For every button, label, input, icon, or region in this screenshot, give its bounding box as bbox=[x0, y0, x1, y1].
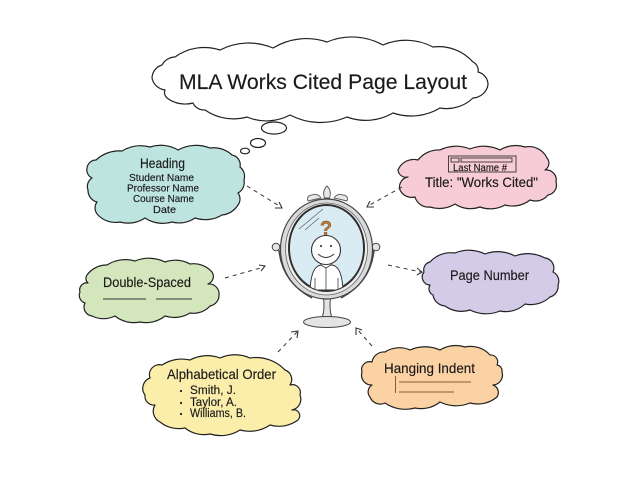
last name label: Last Name # bbox=[453, 163, 507, 174]
indent lines bbox=[396, 376, 471, 393]
page number text: Page Number bbox=[450, 267, 529, 283]
panel: double-spaced bbox=[79, 258, 219, 323]
heading details: Professor Name bbox=[127, 182, 199, 194]
double-spaced text: Double-Spaced bbox=[103, 274, 191, 290]
title: MLA Works Cited Page Layout bbox=[179, 70, 467, 94]
mirror frame bbox=[280, 199, 372, 299]
panel: title works cited bbox=[398, 146, 556, 209]
heading details: Course Name bbox=[133, 193, 194, 205]
arrow: title to mirror bbox=[367, 187, 402, 207]
heading details: Date bbox=[153, 204, 176, 216]
mirror stand bbox=[279, 250, 374, 328]
mirror knobs bbox=[272, 243, 380, 251]
spacing lines bbox=[103, 298, 192, 300]
heading details: Student Name bbox=[129, 172, 194, 184]
heading details bbox=[127, 172, 199, 216]
mirror crest bbox=[308, 186, 348, 201]
mirror glass bbox=[289, 205, 364, 291]
arrow: hanging indent to mirror bbox=[356, 328, 372, 346]
alphabetical order text: Alphabetical Order bbox=[167, 366, 276, 382]
title cloud bbox=[152, 37, 488, 123]
glass reflection bbox=[299, 209, 323, 230]
arrow: heading to mirror bbox=[247, 186, 282, 208]
icon: mirror bbox=[272, 186, 380, 328]
hanging indent text: Hanging Indent bbox=[384, 360, 475, 376]
figure bbox=[310, 236, 343, 291]
arrow: mirror to page number bbox=[388, 265, 422, 275]
panel: heading bbox=[87, 145, 245, 223]
name list bbox=[180, 385, 246, 420]
arrow: alphabetical order to mirror bbox=[278, 331, 298, 352]
name list: Smith, J. bbox=[190, 385, 236, 397]
panel: alphabetical order bbox=[143, 355, 301, 436]
panel: page number bbox=[422, 250, 559, 314]
works cited text: Title: "Works Cited" bbox=[425, 174, 538, 190]
thought bubbles bbox=[240, 122, 286, 154]
name list: Williams, B. bbox=[190, 408, 246, 420]
question mark: ? bbox=[320, 218, 332, 240]
infographic bbox=[78, 36, 560, 436]
name list: Taylor, A. bbox=[190, 397, 237, 409]
arrow: double-spaced to mirror bbox=[225, 265, 265, 278]
icon: page header bbox=[448, 156, 516, 172]
heading text: Heading bbox=[140, 155, 185, 171]
panel: hanging indent bbox=[362, 346, 502, 409]
